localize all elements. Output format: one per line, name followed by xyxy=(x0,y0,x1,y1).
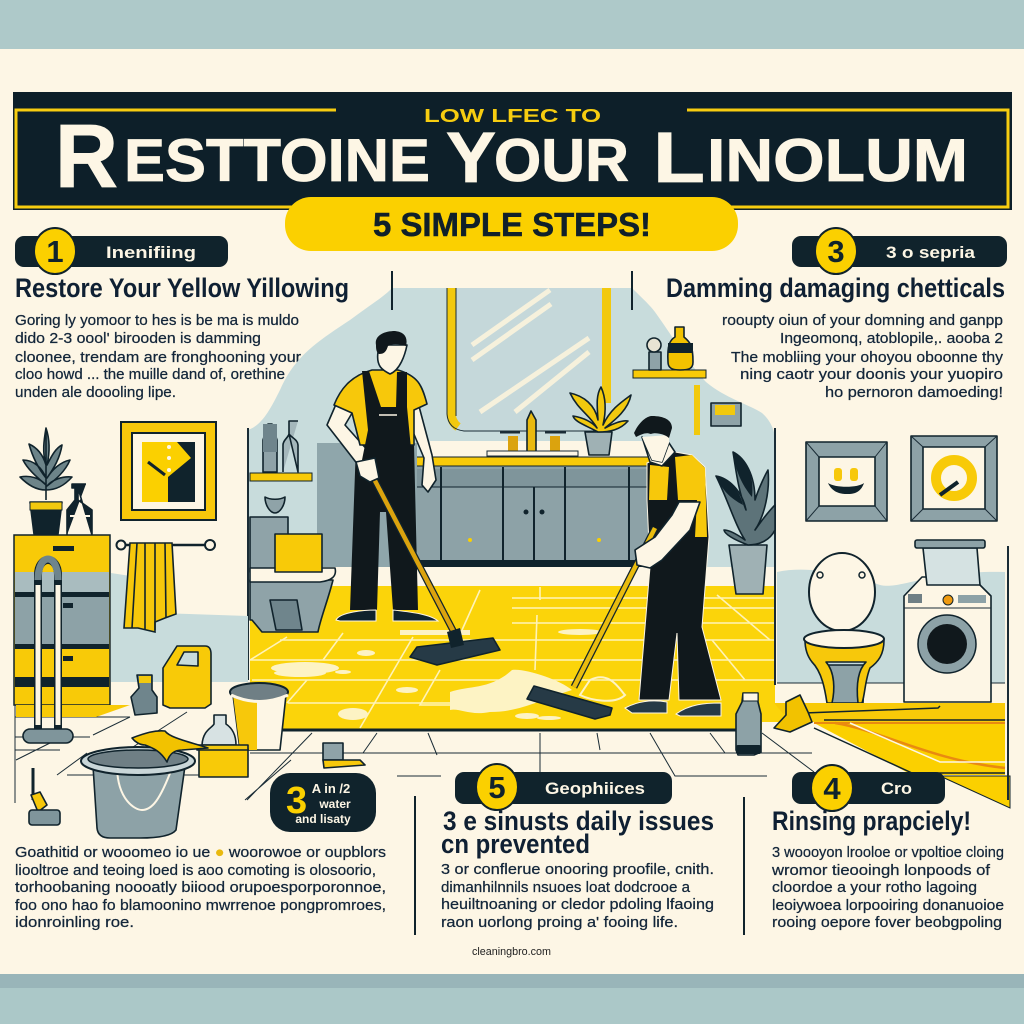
worker one pocket xyxy=(379,414,397,416)
step 3b badge: and lisaty xyxy=(295,812,351,826)
worker one shirt xyxy=(334,370,427,445)
central bathroom scene xyxy=(248,288,1005,730)
step 5 body text xyxy=(441,861,714,931)
worker one xyxy=(327,331,500,665)
right vertical wall line xyxy=(1007,546,1009,800)
mop one xyxy=(372,475,500,665)
bottom colour band xyxy=(0,974,1024,1024)
worker one overalls xyxy=(358,371,414,480)
step 3b body text: Goathitid or wooomeo io ue ● woorowoe or oupblors xyxy=(15,844,386,861)
step 5 heading: 3 e sinusts daily issues xyxy=(443,806,714,836)
main title: Y xyxy=(446,119,496,198)
left cabinet xyxy=(14,535,110,705)
vertical dividers xyxy=(392,271,744,935)
step 3b badge xyxy=(270,773,376,832)
main title: ESTTOINE xyxy=(124,127,430,194)
yellow shelf with bottles xyxy=(250,421,312,481)
step 5 badge: Geophiices xyxy=(545,779,645,798)
yellow jug xyxy=(163,646,211,708)
step 3b body text: idonroinling roe. xyxy=(15,914,134,931)
main title: L xyxy=(653,119,705,198)
rubber gloves xyxy=(774,695,812,732)
mop two xyxy=(527,528,655,719)
faucet xyxy=(487,411,578,456)
worker one hand xyxy=(356,458,379,482)
subtitle pill xyxy=(285,197,738,251)
step 5 body text: heuiltnoaning or cledor pdoling lfaoing xyxy=(441,896,714,913)
step 4 badge: 4 xyxy=(823,771,841,806)
step 5 body text: dimanhilnnils nsuoes loat dodcrooe a xyxy=(441,879,691,896)
yellow box xyxy=(197,745,248,777)
step 5 body text: raon uorlong proing a' fooing life. xyxy=(441,914,678,931)
step 4 badge: Cro xyxy=(881,779,912,798)
step 4 body text: 3 woooyon lrooloe or vpoltioe cloing xyxy=(772,844,1004,861)
washing machine xyxy=(904,540,991,702)
left wall picture xyxy=(121,422,216,520)
towel rack xyxy=(116,540,215,632)
worker one head xyxy=(376,331,407,374)
step 3 body text: The mobliing your ohoyou oboonne thy xyxy=(731,349,1004,366)
step 4 body text: wromor tieooingh lonpoods of xyxy=(771,862,991,879)
brush tool xyxy=(29,768,60,825)
center toilet xyxy=(250,517,335,632)
subtitle pill: 5 SIMPLE STEPS! xyxy=(373,206,651,243)
step 3b badge: A in /2 xyxy=(312,781,350,796)
step 1 body text xyxy=(15,312,301,401)
worker two xyxy=(527,416,721,719)
small floor tool xyxy=(323,743,365,768)
step 4 heading: Rinsing prapciely! xyxy=(772,806,971,836)
vacuum cleaner xyxy=(23,559,73,743)
step 3 body text: ho pernoron damoeding! xyxy=(825,384,1003,401)
wall backdrop xyxy=(248,288,775,590)
step 5 heading: cn prevented xyxy=(441,829,590,859)
footer source: cleaningbro.com xyxy=(472,946,551,958)
worker two shirt xyxy=(649,455,707,537)
worker two body xyxy=(639,452,721,700)
step 3 badge: 3 xyxy=(827,234,845,269)
corner plant xyxy=(716,452,775,594)
baseboard xyxy=(250,567,775,587)
yellow floor patch left xyxy=(16,705,130,717)
grey bucket with rag xyxy=(81,731,208,838)
step 3 body text: ning caotr your doonis your yuopiro xyxy=(740,366,1003,383)
title banner xyxy=(13,92,1012,210)
step 1 badge: Inenifiing xyxy=(106,243,196,262)
top colour band xyxy=(0,0,1024,49)
right wall pictures xyxy=(806,436,997,521)
left plant xyxy=(20,428,72,534)
spray bottle xyxy=(67,484,92,535)
white bottle xyxy=(202,715,236,745)
floor spills xyxy=(271,629,625,720)
shelf with bottles xyxy=(633,327,706,378)
worker two shoes xyxy=(625,701,721,716)
main title xyxy=(55,107,968,207)
main title: OUR xyxy=(494,127,629,194)
vanity cabinet xyxy=(413,457,650,567)
step 3 body text: Ingeomonq, atoblopile,. aooba 2 xyxy=(780,330,1003,347)
right wall patch xyxy=(777,570,1005,683)
yellow rug xyxy=(814,720,1010,808)
main title: INOLUM xyxy=(707,127,968,194)
left wall edge line xyxy=(247,428,249,680)
right toilet xyxy=(804,553,884,703)
yellow floor xyxy=(250,586,1005,730)
wall fixture xyxy=(697,385,741,435)
worker two head xyxy=(634,416,675,466)
mirror xyxy=(447,288,611,431)
step 3b body text: liooltroe and teoing loed is aoo comoting is olosoorio, xyxy=(15,862,376,879)
step 5 body text: 3 or conflerue onooring proofile, cnith. xyxy=(441,861,714,878)
back wall panel xyxy=(317,443,417,567)
step 3 badge xyxy=(792,228,1007,274)
grey picture xyxy=(806,442,887,521)
ring picture xyxy=(911,436,997,521)
mirror-side plant xyxy=(570,387,631,455)
step 4 badge xyxy=(792,765,945,811)
white and yellow bucket xyxy=(230,683,288,750)
step 3 body text xyxy=(722,312,1004,401)
step 1 body text: cloo howd ... the muille dand of, orethine xyxy=(15,366,285,383)
right floor strip xyxy=(774,703,1005,722)
right wall line xyxy=(774,428,776,685)
step 3b badge: water xyxy=(318,797,351,811)
step 3 badge: 3 o sepria xyxy=(886,243,976,262)
step 4 body text: leoiywoea lorpooiring donanuoioe xyxy=(772,897,1004,914)
step 5 badge xyxy=(455,764,672,810)
worker one legs xyxy=(350,445,418,610)
step 1 body text: Goring ly yomoor to hes is be ma is muldo xyxy=(15,312,299,329)
small bottle xyxy=(131,675,157,715)
step 4 body text: cloordoe a your rotho lagoing xyxy=(772,879,977,896)
backsplash xyxy=(430,441,650,458)
small sink xyxy=(265,497,285,513)
step 1 body text: unden ale doooling lipe. xyxy=(15,384,176,401)
step 3b body text xyxy=(15,844,386,931)
left wall patch xyxy=(111,573,248,682)
step 1 body text: cloonee, trendam are fronghooning your xyxy=(15,349,301,366)
step 4 body text xyxy=(771,844,1004,931)
worker two arm xyxy=(635,502,700,568)
step 4 body text: rooing oepore fover beobgpoling xyxy=(772,914,1002,931)
step 1 badge xyxy=(15,228,228,274)
left floor tiles xyxy=(15,705,814,803)
step 3 body text: rooupty oiun of your domning and ganpp xyxy=(722,312,1003,329)
step 5 badge: 5 xyxy=(488,770,506,805)
step 1 heading: Restore Your Yellow Yillowing xyxy=(15,273,349,303)
worker one arms xyxy=(327,395,436,492)
right baseboard xyxy=(777,682,1005,684)
worker one shoes xyxy=(336,610,438,621)
kicker text: LOW LFEC TO xyxy=(424,106,601,126)
main title: R xyxy=(55,107,118,207)
step 5 heading xyxy=(441,806,714,859)
step 3b body text: foo ono hao fo blamoonino mwrrenoe pongpromroes, xyxy=(15,897,386,914)
floor bottle xyxy=(736,693,761,755)
step 1 badge: 1 xyxy=(46,234,64,269)
step 1 body text: dido 2-3 oool' birooden is damming xyxy=(15,330,261,347)
step 3b badge: 3 xyxy=(286,780,307,822)
step 3b body text: torhoobaning noooatly biiood orupoesporporonnoe, xyxy=(15,879,386,896)
